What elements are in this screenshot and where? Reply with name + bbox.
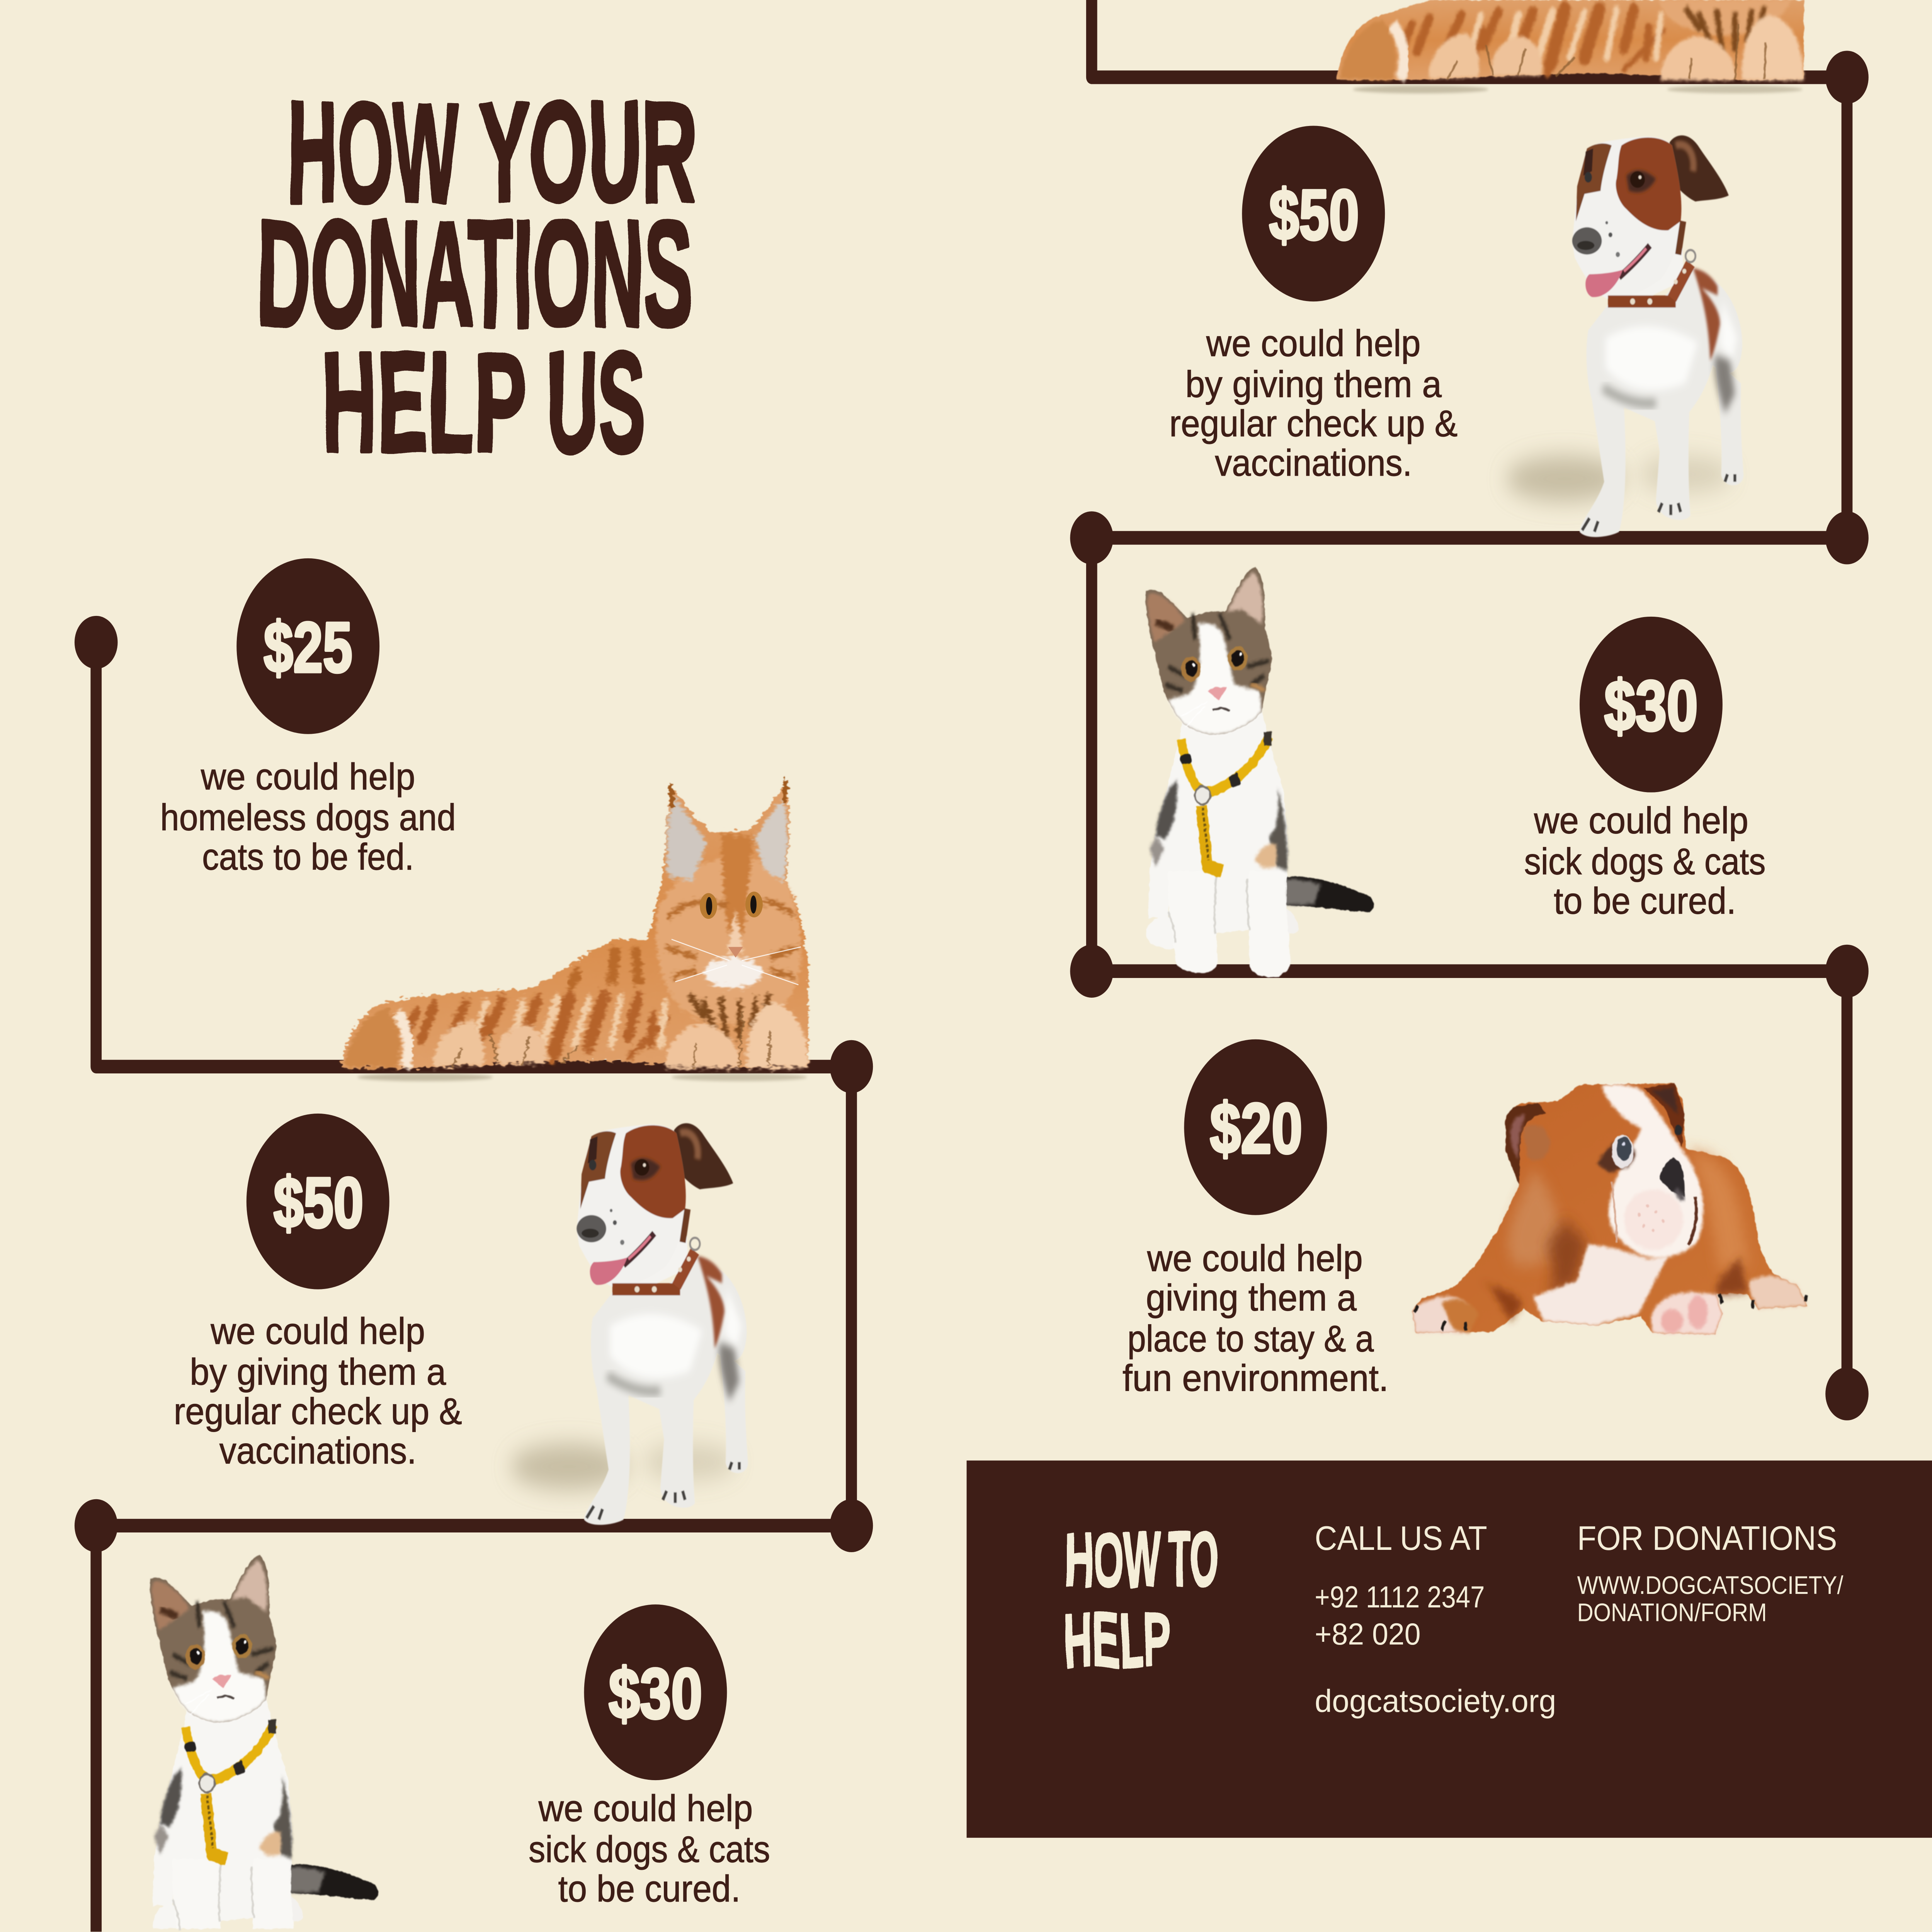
contact: call us at — [1315, 1519, 1556, 1719]
description: $50: we could help — [210, 1310, 425, 1352]
description: $50: vaccinations. — [1215, 442, 1412, 484]
icon: terrier dog — [1506, 135, 1743, 537]
contact: for donations: WWW.DOGCATSOCIETY/ — [1577, 1571, 1844, 1599]
heading: how to help: HELP — [1065, 1597, 1170, 1683]
heading: how to help: TO — [1168, 1516, 1219, 1603]
contact: call us at: +82 020 — [1315, 1617, 1421, 1651]
title: HELP — [321, 323, 526, 482]
icon: kitten with harness, cropped at bottom — [150, 1554, 378, 1930]
icon: terrier dog — [510, 1123, 748, 1525]
description: $25: homeless dogs and — [160, 797, 456, 838]
contact: call us at: dogcatsociety.org — [1315, 1683, 1556, 1719]
heading: how to help — [1065, 1516, 1219, 1683]
description: $20: giving them a — [1146, 1277, 1357, 1318]
badge: $25: $25 — [264, 607, 352, 687]
badge: $30 — [584, 1604, 727, 1780]
title — [257, 73, 696, 482]
description: $50: by giving them a — [1185, 364, 1442, 405]
connector: left timeline — [75, 616, 873, 1932]
badge: $50: $50 — [1269, 175, 1359, 255]
contact: call us at: CALL US AT — [1315, 1519, 1487, 1558]
description: $50 — [1169, 323, 1458, 484]
badge: $50 — [247, 1114, 389, 1289]
contact: for donations: DONATION/FORM — [1577, 1598, 1767, 1627]
panel: $50 donation, right page — [1169, 126, 1743, 537]
description: $50: vaccinations. — [219, 1430, 417, 1471]
description: $30 — [1524, 800, 1766, 922]
title: HOW — [287, 73, 459, 232]
panel: $20 donation — [1122, 1039, 1808, 1399]
title: DONATIONS — [257, 189, 692, 358]
icon: orange cat — [341, 779, 809, 1081]
description: $30 — [529, 1787, 770, 1910]
description: $20: fun environment. — [1122, 1357, 1389, 1399]
description: $50 — [174, 1310, 462, 1471]
panel: how to help footer — [967, 1461, 1932, 1838]
description: $25: we could help — [201, 756, 415, 798]
description: $20 — [1122, 1238, 1389, 1399]
description: $30: sick dogs & cats — [1524, 841, 1766, 882]
icon: kitten with harness — [1146, 566, 1374, 977]
badge: $50 — [1242, 126, 1385, 301]
badge: $50: $50 — [274, 1163, 364, 1242]
description: $20: we could help — [1147, 1238, 1363, 1279]
description: $20: place to stay & a — [1128, 1318, 1374, 1359]
description: $50: by giving them a — [190, 1351, 446, 1393]
description: $25: cats to be fed. — [202, 836, 414, 878]
title: US — [547, 323, 646, 482]
description: $30: to be cured. — [558, 1868, 740, 1910]
badge: $30: $30 — [609, 1654, 702, 1733]
icon: bulldog puppy — [1412, 1083, 1808, 1335]
badge: $30 — [1580, 617, 1723, 793]
heading: how to help: HOW — [1065, 1516, 1161, 1603]
panel: $30 donation — [150, 1554, 770, 1930]
panel: $50 donation — [174, 1114, 748, 1525]
contact: for donations — [1577, 1519, 1844, 1627]
description: $50: regular check up & — [174, 1391, 462, 1432]
description: $30: sick dogs & cats — [529, 1828, 770, 1870]
icon: orange cat, cropped at top — [1337, 0, 1804, 94]
description: $50: regular check up & — [1169, 403, 1458, 444]
description: $50: we could help — [1206, 323, 1421, 364]
badge: $20 — [1184, 1039, 1327, 1215]
badge: $20: $20 — [1210, 1088, 1303, 1168]
description: $30: we could help — [538, 1787, 753, 1829]
description: $25 — [160, 756, 456, 878]
panel: $30 donation, right page — [1146, 566, 1766, 977]
description: $30: to be cured. — [1554, 880, 1736, 922]
panel: $25 donation — [160, 558, 809, 1081]
contact: for donations: FOR DONATIONS — [1577, 1519, 1837, 1558]
description: $30: we could help — [1534, 800, 1748, 841]
contact: call us at: +92 1112 2347 — [1315, 1580, 1485, 1614]
title: YOUR — [479, 73, 696, 232]
badge: $30: $30 — [1604, 666, 1698, 745]
badge: $25 — [236, 558, 379, 734]
connector: right timeline — [1070, 0, 1869, 1420]
